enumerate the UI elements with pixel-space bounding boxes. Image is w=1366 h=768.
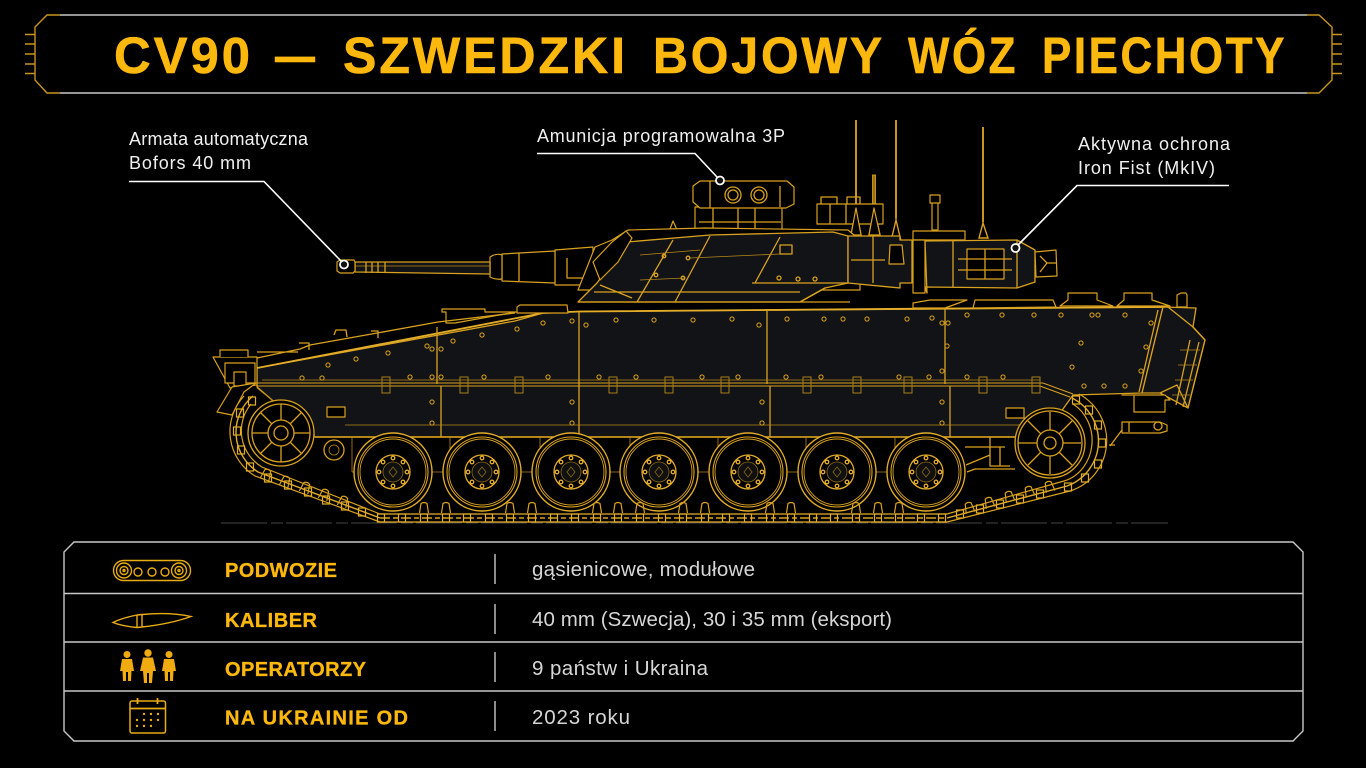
row: in Ukraine since [130,698,630,733]
front sprocket [248,400,314,466]
turret roof equipment [669,181,965,240]
suspension area [324,437,1015,472]
cannon [337,247,593,285]
row: caliber: 40 mm (Szwecja), 30 i 35 mm (eksport) [532,608,892,631]
title text [114,27,1287,84]
row: in Ukraine since: 2023 roku [532,706,630,729]
specification table [64,542,1303,741]
icon: calendar [130,698,166,733]
callout: ammunition: Amunicja programowalna 3P [537,126,785,146]
title text: PIECHOTY [1042,27,1287,84]
row: caliber: KALIBER [225,610,318,632]
callout: active protection: Aktywna ochrona [1078,134,1231,154]
title banner [25,15,1342,93]
callout: cannon: Armata automatyczna [129,129,309,149]
icon: bullet [113,614,191,628]
front nose and fender [213,350,257,415]
antennas [851,120,988,245]
tank blueprint drawing [213,120,1205,523]
row: operators [120,649,709,683]
title text: SZWEDZKI [343,27,628,84]
row: chassis: PODWOZIE [225,560,337,582]
rear door [1109,307,1205,446]
title text: CV90 [114,27,253,84]
hull [257,307,1163,437]
row: chassis: gąsienicowe, modułowe [532,558,755,581]
callout: active protection [1012,134,1231,252]
icon: tracked chassis [114,560,190,580]
row: in Ukraine since: NA UKRAINIE OD [225,708,408,730]
callout: ammunition [537,126,785,184]
title text: — [275,27,315,84]
callout: cannon: Bofors 40 mm [129,153,251,173]
callout: active protection: Iron Fist (MkIV) [1078,158,1215,178]
turret rear and Iron Fist housing [848,236,1057,293]
ground line [221,522,1168,524]
track [230,394,1107,522]
hull top stowage [257,293,1187,358]
callout: cannon [129,129,348,268]
icon: three people [120,649,176,683]
row: operators: 9 państw i Ukraina [532,657,709,680]
row: operators: OPERATORZY [225,659,367,681]
turret body [578,228,860,302]
row: caliber [113,608,892,632]
road wheels [354,433,965,511]
rear idler [1015,408,1085,478]
title text: BOJOWY [653,27,885,84]
title text: WÓZ [908,27,1018,84]
row: chassis [114,558,755,582]
